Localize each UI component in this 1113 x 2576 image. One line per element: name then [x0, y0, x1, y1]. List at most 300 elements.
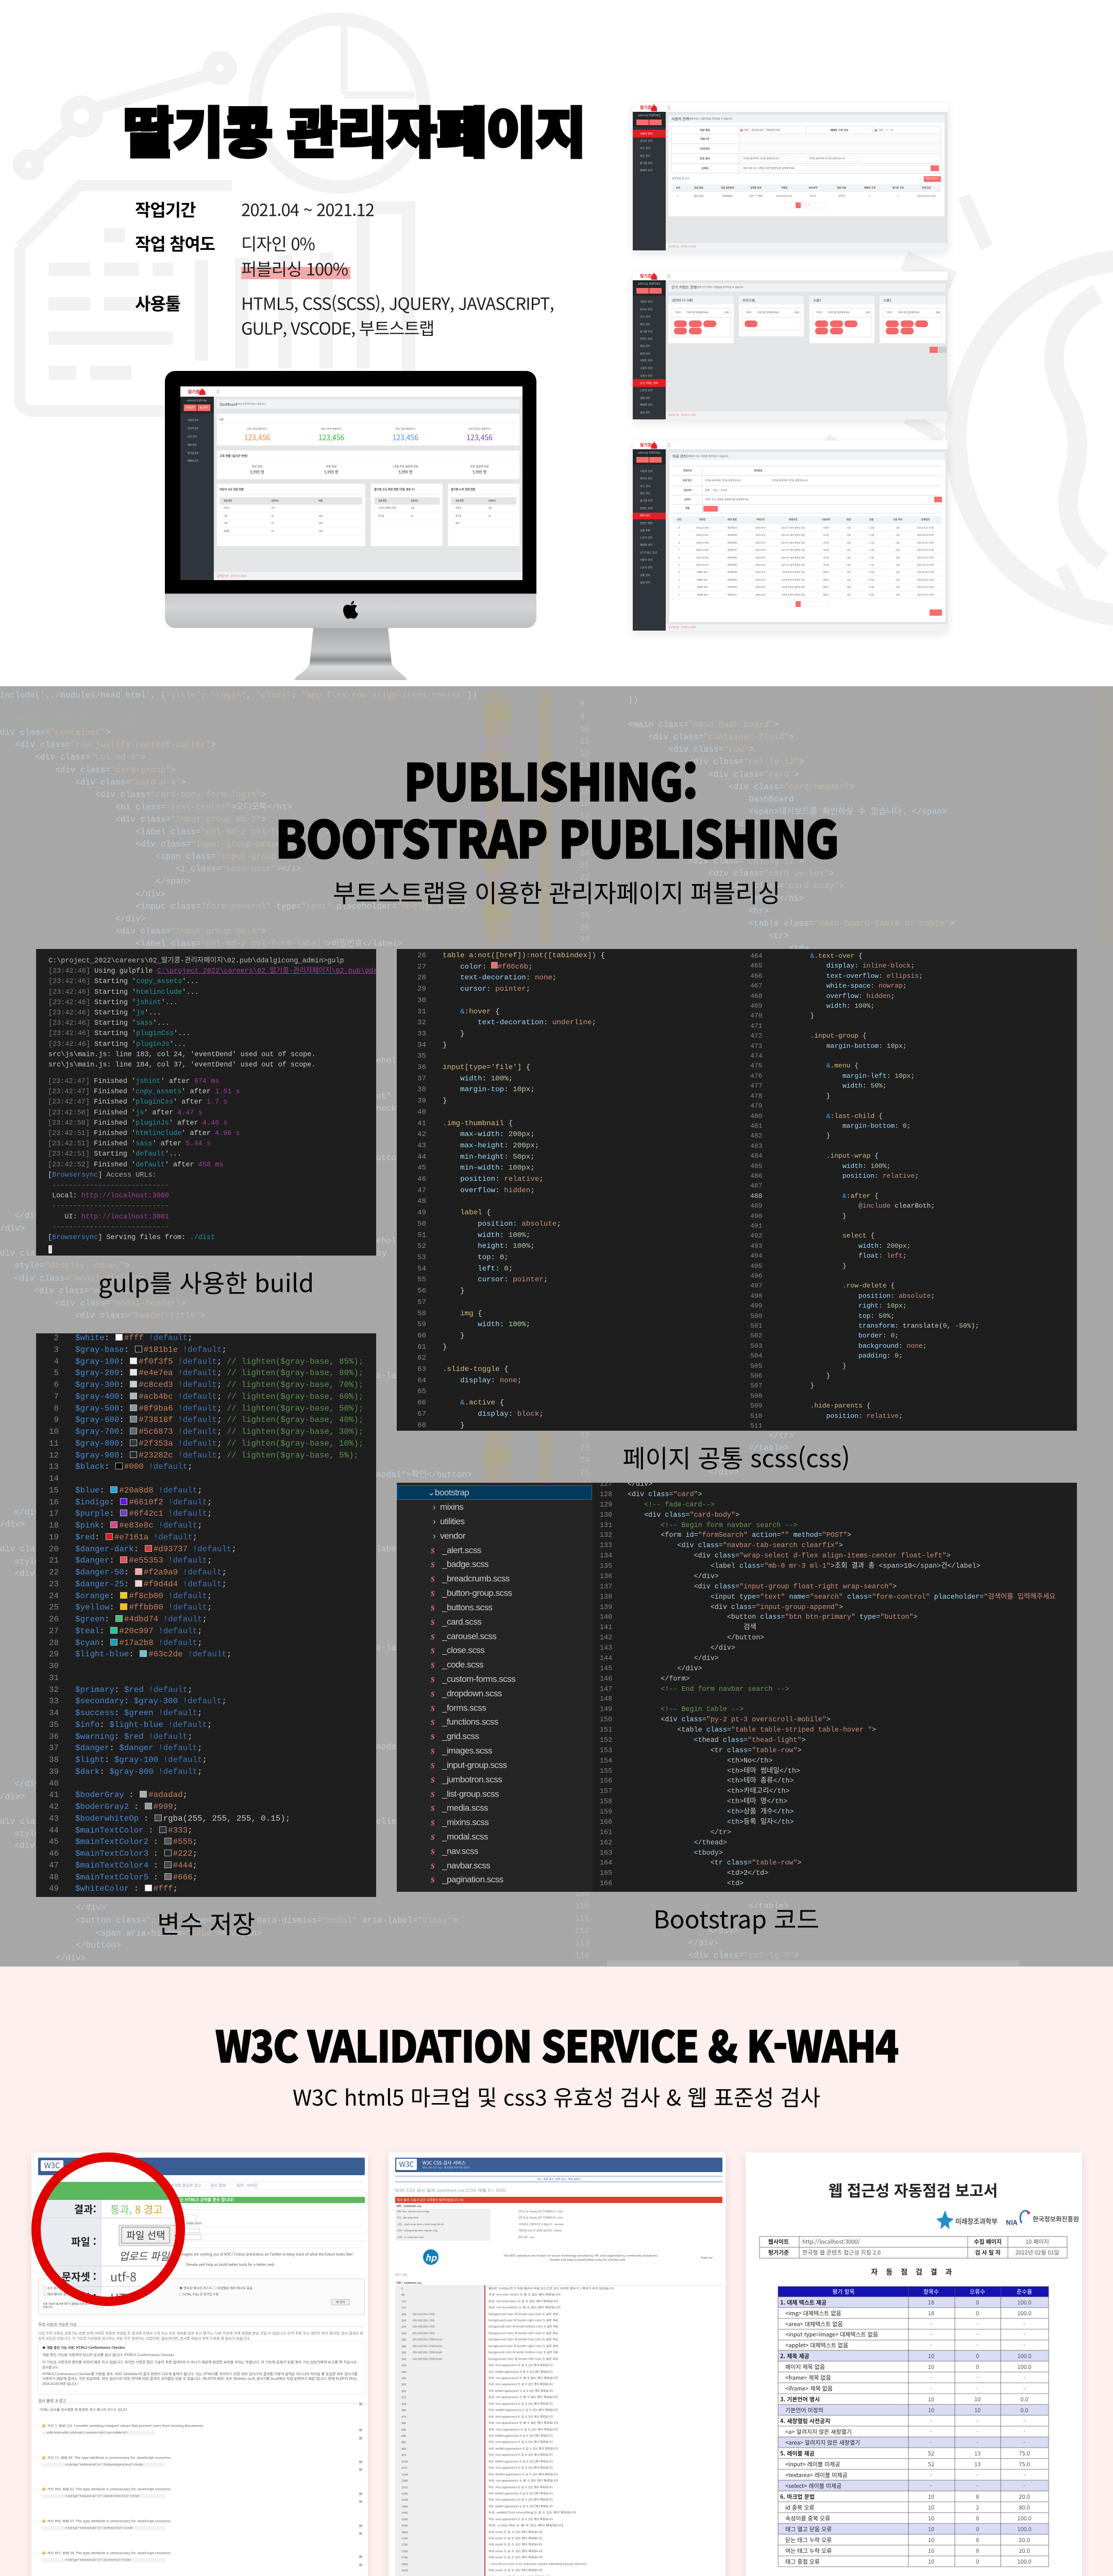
title line 2: BOOTSTRAP PUBLISHING	[275, 799, 838, 873]
admin screen: keyword management: 키워드를 입력해주세요	[898, 311, 920, 314]
admin screen: theme management: 8	[679, 541, 680, 545]
admin screen: theme management: 아이폰	[823, 526, 829, 530]
card: CSS3 validity check: background-color 와 border-left-color 는 같은 색상	[488, 2357, 558, 2361]
card: CSS3 validity check: 속성 -o-box-flex 는 알 수 있는 벤더 확장입니다	[488, 2523, 563, 2528]
admin screen: theme management: 00000008	[728, 541, 737, 545]
info: tools	[135, 291, 554, 340]
file tree: s	[431, 1788, 435, 1800]
admin screen: keyword management: 인기 키워드 관리	[671, 285, 697, 290]
admin screen: theme management: 6	[679, 556, 680, 560]
card: HTML markup check: 주의와 중요한 경고	[171, 2182, 201, 2189]
card: web accessibility report: 미래창조과학부	[955, 2216, 998, 2226]
card: CSS3 validity check: 1418	[401, 2498, 408, 2502]
dashboard screen: 30	[411, 515, 413, 518]
panel: bootstrap code: </div> <div class="card"> <!-- fade-card--> <div class="card-body"> <!-- Begin form navbar search --> <form id="formSearch" action="" method="POST"> <div class="navbar-tab-search clearfix"> <div class="wrap-select d-flex align-items-center float-left"> <label class="mb-0 mr-3 ml-1">조회 결과 총 <span>10</span>건</label> </div> <div class="input-group float-right wrap-search"> <input type="text" name="search" class="form-control" placeholder="검색어를 입력해주세요 <div class="input-group-append"> <button class="btn btn-primary" type="button"> 검색 </button> </div> </div> </div> </form> <!-- End form navbar search --> <!-- Begin table --> <div class="py-2 pt-3 overscroll-mobile"> <table class="table table-striped table-hover "> <thead class="thead-light"> <tr class="table-row"> <th>No</th> <th>테마 썸네일</th> <th>테마 종류</th> <th>카테고리</th> <th>테마 명</th> <th>상품 개수</th> <th>등록 일자</th> </tr> </thead> <tbody> <tr class="table-row"> <td>2</td> <td>	[628, 1483, 1055, 1888]
card: CSS3 validity check: 968	[401, 2447, 406, 2451]
card: HTML markup check: 다음 주의 사항은 검증기는 검증 전에 어떠한 추측성 작업을 한 결과에 의해서 누락 또는 송동 정보를 감조 표시 했거나, 다른 이유에 의해 영향을 받은 것일 수 있습니다. 만약 추측 또는 대안이 맞지 않다면, 검사 결과는 완	[38, 2330, 363, 2335]
card: CSS3 validity check: 186	[401, 2337, 406, 2342]
card: CSS3 validity check: background-color 와 border-top-color 는 같은 색상	[488, 2337, 558, 2341]
card: HTML markup check: 라인 457, 칼럼 54: The type attribute is unnecessary for JavaScript resources.	[47, 2550, 172, 2555]
card: web accessibility report: 75.0	[1019, 2460, 1030, 2468]
card: HTML markup check: 주의 사항과 가능한 이슈	[38, 2321, 77, 2328]
card: CSS3 validity check: 923	[401, 2453, 406, 2457]
dashboard screen: 일반 회원	[252, 464, 262, 469]
info: participation: 퍼블리싱 100%	[241, 256, 348, 280]
card: CSS3 validity check: W3C	[399, 2159, 414, 2170]
dashboard screen: DAU (전일 방문자수)	[247, 427, 267, 431]
background code editor: a-la	[376, 1643, 396, 1653]
card: CSS3 validity check: 속성 -moz-appearance 는 값 수 있는 벤더 확장입니다	[488, 2414, 553, 2418]
admin screen: user management: 메토 관리	[640, 155, 650, 158]
card: HTML markup check: Donate and help us build better tools for a better web.	[186, 2262, 275, 2267]
card: CSS3 validity check: 600	[401, 2434, 406, 2438]
card: HTML markup check: □ 소스 보기	[43, 2285, 59, 2291]
card: web accessibility report: -	[1023, 2330, 1025, 2338]
dashboard screen: 100	[488, 507, 492, 510]
card: HTML markup check: 이 기능은 사용자의 편의를 위하여 제공 하고 있습니다. 하지만 사용한 첨단 기술의 최종 업데이트가 아니기 때문에 완전한 보장을 하지는 못합니다. 이 기능에 문제가 있을 경우 기능 담당자에게 보고를 해 주십시오.	[42, 2359, 358, 2364]
admin screen: user management: Y	[897, 195, 899, 198]
card: web accessibility report: -	[976, 2438, 979, 2447]
red highlight ring: 결과:	[74, 2201, 96, 2216]
admin screen: theme management: 2021.08.10 14:00	[917, 571, 934, 574]
label: bootstrap code: Bootstrap 코드	[653, 1900, 819, 1936]
card: CSS3 validity check: 1756	[401, 2543, 408, 2547]
card: web accessibility report: 2	[976, 2503, 979, 2512]
background code editor: </div> <div class="col-lg-3">	[688, 1938, 799, 1960]
file tree: s	[431, 1659, 435, 1670]
card: CSS3 validity check: 속성 -webkit-appearance 는 값 수 있는 벤더 확장입니다	[488, 2492, 553, 2496]
card: CSS3 validity check: 속성 -webkit-appearance 는 값 수 있는 벤더 확장입니다	[488, 2388, 553, 2393]
admin screen: user management: 1	[678, 195, 679, 198]
admin screen: theme management: 상품	[869, 518, 873, 521]
admin screen: user management: 베베북 구독 여부	[830, 129, 849, 132]
card: CSS3 validity check: 1596	[401, 2517, 408, 2521]
card: CSS3 validity check: 경고 (34)	[395, 2272, 407, 2277]
card: web accessibility report: <input type=image> 대체텍스트 없음	[785, 2330, 878, 2338]
panel: page common scss: table a:not([href]):not([tabindex]) { color: #f86c6b; text-decoration: none; cursor: pointer; &:hover { text-decoration: underline; } } input[type='file'] { width: 100%; margin-top: 10px; } .img-thumbnail { max-width: 200px; max-height: 200px; min-height: 50px; min-width: 100px; position: relative; overflow: hidden; label { position: absolute; width: 100%; height: 100%; top: 0; left: 0; cursor: pointer; } img { width: 100%; } } .slide-toggle { display: none; &.active { display: block; }	[443, 952, 605, 1430]
admin screen: user management: 베베북 관리	[640, 169, 652, 172]
file tree: _button-group.scss	[442, 1588, 512, 1598]
admin screen: keyword management: 키워드를 입력해주세요	[757, 311, 779, 314]
card: CSS3 validity check: ::-moz-focus-inner is an unknown vendor extended pseudo-element	[488, 2563, 586, 2566]
dashboard screen: admin님 안녕하세요	[187, 399, 207, 402]
icon: apple logo	[343, 601, 358, 619]
card: CSS3 validity check: 속성 -moz-appearance 는 값 수 있는 벤더 확장입니다	[488, 2498, 553, 2502]
admin screen: user management: 등록되어있는 사용자들을 관리하실 수 있습니다.	[687, 117, 733, 121]
admin screen: theme management: 00000009	[728, 534, 737, 537]
file tree: s	[431, 1731, 435, 1742]
admin screen: user management: 회원 일련번호	[721, 186, 734, 190]
card: CSS3 validity check: 해석 오류 : auto	[518, 2235, 534, 2239]
card: CSS3 validity check: 496 face .docum-cont .image	[397, 2210, 430, 2213]
admin screen: theme management: 00000002	[728, 586, 737, 589]
card: web accessibility report: 여는 태그 누락 오류	[785, 2547, 832, 2555]
file tree: s	[431, 1716, 435, 1727]
background code editor: ut"	[376, 1091, 391, 1101]
card: CSS3 validity check: background-color 와 border-bottom-color 는 같은 색상	[488, 2350, 558, 2354]
file tree: _list-group.scss	[442, 1789, 499, 1799]
card: CSS3 validity check: 속성 -ms-appearance 는 알 수 없는 벤더 확장입니다	[488, 2376, 558, 2380]
card: CSS3 validity check: .btn:not(.btn-).title.hover	[412, 2350, 443, 2354]
card: CSS3 validity check: 234	[401, 2363, 406, 2367]
dashboard screen: 사용자수	[411, 499, 418, 502]
dashboard screen: 5,999 명	[250, 469, 264, 475]
dashboard screen: 123,456	[318, 432, 344, 443]
card: HTML markup check: width=device-width, initial-scale=1, maximum-scale=1, user-scalable=no">	[47, 2431, 128, 2434]
admin screen: keyword management	[633, 272, 948, 419]
dashboard screen: 회원 종류	[456, 499, 464, 502]
admin screen: theme management: 테마스토어	[755, 541, 766, 545]
card: web accessibility report: 20.0	[1019, 2547, 1030, 2555]
admin screen: theme management: 윤찬딸기콩 - 관리자 © 2020	[668, 625, 696, 629]
file tree: s	[431, 1602, 435, 1613]
red highlight ring: 파일 선택	[126, 2228, 165, 2242]
card: CSS3 validity check: 186	[401, 2350, 406, 2354]
admin screen: keyword management: 사용자 관리	[640, 374, 652, 378]
card: web accessibility report: 5. 레이블 제공	[780, 2449, 815, 2458]
admin screen: theme management: 사용	[847, 548, 851, 552]
panel: page common scss: 464 465 466 467 468 469 470 471 472 473 474 475 476 477 478 479 480 481 482 483 484 485 486 487 488 489 490 491 492 493 494 495 496 497 498 499 500 501 502 503 504 505 506 507 508 509 510 511	[750, 952, 762, 1430]
card: web accessibility report: 태그 중첩 오류	[785, 2557, 820, 2566]
admin screen: keyword management: 공통 관리	[640, 397, 650, 400]
dashboard screen: 딸기콩 신규 회원 현황 (전일 생성 수)	[374, 487, 415, 492]
file tree: _nav.scss	[442, 1846, 478, 1856]
admin screen: keyword management: 관리자 관리	[640, 308, 652, 311]
admin screen: theme management: 사용	[847, 556, 851, 560]
admin screen: theme management: 테마종류	[754, 469, 763, 472]
red highlight ring	[31, 2153, 185, 2306]
admin screen: user management: 사용자 관리	[671, 116, 689, 122]
info: tools: GULP, VSCODE, 부트스트랩	[241, 315, 434, 340]
background code editor: <div class="modal-dialog">	[14, 1274, 145, 1283]
dashboard screen: 탈퇴	[456, 521, 460, 525]
card: web accessibility report: 6. 마크업 문법	[780, 2493, 815, 2501]
admin screen: theme management: 사용	[896, 585, 900, 589]
card: web accessibility report: id 중복 오류	[785, 2503, 814, 2512]
card: CSS3 validity check: .btn:not(.btn-).title.hover	[412, 2358, 443, 2361]
card: HTML markup check: 축하 · 아이콘	[237, 2182, 258, 2189]
admin screen: theme management: 테마스토어	[755, 533, 766, 537]
card: CSS3 validity check: 186	[401, 2357, 406, 2361]
card: HTML markup check: □ HTML-Tidy 로 마크업 수정	[179, 2292, 218, 2297]
admin screen: theme management: 스토리 관리	[640, 536, 652, 540]
file tree: s	[431, 1817, 435, 1828]
card: web accessibility report: <iframe> 제목 없음	[785, 2384, 833, 2393]
admin screen: keyword management: 키워드	[886, 311, 892, 314]
card: CSS3 validity check: 1334	[401, 2472, 408, 2477]
card: web accessibility report: 10	[928, 2352, 934, 2360]
card: CSS3 validity check: 324	[401, 2402, 406, 2406]
info: work period: 작업기간	[135, 197, 195, 222]
admin screen: keyword management: 키워드	[746, 311, 752, 314]
admin screen: theme management: 그림책 콘텐츠 컬렉션 모음	[781, 578, 805, 582]
admin screen: theme management: 이것을 클릭하여 기간을 설정하십시오	[772, 479, 808, 482]
card: CSS3 validity check: 2193	[401, 2568, 408, 2572]
card: HTML markup check: ◉ 연속된 메시지 리스트 ○ 타입별로 에러 메시지 묶음	[179, 2285, 252, 2291]
file tree: s	[431, 1587, 435, 1599]
card: CSS3 validity check: 184	[401, 2325, 406, 2329]
admin screen: theme management: 그림책 콘텐츠 컬렉션 모음	[781, 593, 805, 597]
background code editor: <div	[14, 1569, 35, 1579]
card: CSS3 validity check: 속성 -ms-appearance 는 알 수 없는 벤더 확장입니다	[488, 2478, 558, 2482]
background code editor: <div class="header-title">	[75, 1311, 206, 1320]
background code editor: ehol	[376, 1056, 396, 1065]
card: CSS3 validity check: .btn:not(.btn-).title	[412, 2325, 435, 2329]
admin screen: theme management: 갤럭시	[823, 578, 829, 582]
admin screen: theme management: 2021.08.10 14:00	[917, 556, 934, 560]
card: web accessibility report: 52	[928, 2449, 934, 2458]
admin screen: theme management: 10	[678, 527, 681, 530]
admin screen: keyword management: 연령별 인기 키워드 현황들을 관리하실 수 있습니다.	[695, 285, 744, 289]
background code editor: <button class="close" type="button" data-dismiss="modal" aria-label="Close">	[76, 1916, 458, 1925]
panel: scss variables: $white: #fff !default; $gray-base: #181b1e !default; $gray-100: #f0f3f5 !default; // lighten($gray-base, 85%); $gray-200: #e4e7ea !default; // lighten($gray-base, 80%); $gray-300: #c8ced3 !default; // lighten($gray-base, 70%); $gray-400: #acb4bc !default; // lighten($gray-base, 60%); $gray-500: #8f9ba6 !default; // lighten($gray-base, 50%); $gray-600: #73818f !default; // lighten($gray-base, 40%); $gray-700: #5c6873 !default; // lighten($gray-base, 30%); $gray-800: #2f353a !default; // lighten($gray-base, 10%); $gray-900: #23282c !default; // lighten($gray-base, 5%); $black: #000 !default; $blue: #20a8d8 !default; $indigo: #6610f2 !default; $purple: #6f42c1 !default; $pink: #e83e8c !default; $red: #e7161a !default; $danger-dark: #d93737 !default; $danger: #e55353 !default; $danger-50: #f2a9a9 !default; $danger-25: #f9d4d4 !default; $orange: #f8cb00 !default; $yellow: #ffbb00 !default; $green: #4dbd74 !default; $teal: #20c997 !default; $cyan: #17a2b8 !default; $light-blue: #63c2de !default; $primary: $red !default; $secondary: $gray-300 !default; $success: $green !default; $info: $light-blue !default; $warning: $red !default; $danger: $danger !default; $light: $gray-100 !default; $dark: $gray-800 !default; $boderGray : #adadad; $boderGray2 : #999; $boderwhiteOp : rgba(255, 255, 255, 0.15); $mainTextColor : #333; $mainTextColor2 : #555; $mainTextColor3 : #222; $mainTextColor4 : #444; $mainTextColor5 : #666; $whiteColor : #fff;	[75, 1333, 363, 1893]
card: web accessibility report: 검 사 일 자	[975, 2248, 1001, 2257]
background code editor: </button>	[76, 1940, 121, 1950]
file tree: s	[431, 1874, 435, 1885]
card: web accessibility report: 8	[976, 2547, 979, 2555]
file tree: _alert.scss	[442, 1546, 481, 1555]
admin screen: theme management: 관리자 관리	[640, 477, 652, 480]
card: CSS3 validity check: 속성 zoom 는 값 수 있는 벤더 확장입니다	[488, 2568, 543, 2572]
card: web accessibility report: <select> 레이블 미제공	[785, 2482, 841, 2490]
card: web accessibility report: <frame> 제목 없음	[785, 2374, 831, 2382]
card: CSS3 validity check: .btn:not(.btn-).title.hover	[412, 2344, 443, 2348]
dashboard screen: MAU (전달 방문자수)	[395, 427, 416, 431]
card: web accessibility report: 20.0	[1019, 2536, 1030, 2544]
card: CSS3 validity check: W3C CSS 검사 결과 common.css (CSS 레벨 3 + SVG)	[395, 2188, 506, 2193]
admin screen: theme management: 00000005	[728, 564, 737, 567]
dashboard screen: 123,456	[244, 432, 270, 443]
background code editor: </tr> </table>	[749, 1431, 794, 1453]
card: CSS3 validity check: .btn:not(.btn-).title.hover	[412, 2338, 443, 2341]
file tree: s	[431, 1688, 435, 1699]
card: web accessibility report: -	[930, 2438, 932, 2447]
admin screen: theme management: 사용	[896, 593, 900, 597]
card: CSS3 validity check: background-color 와 border-right-color 는 같은 색상	[488, 2318, 558, 2323]
dashboard screen: 딸기콩	[456, 514, 461, 518]
card: HTML markup check	[31, 2153, 368, 2576]
admin screen: theme management: 사용	[847, 593, 851, 597]
card: web accessibility report: 0	[976, 2309, 979, 2317]
card: CSS3 validity check: .btn:not(.btn-).title	[412, 2312, 435, 2316]
dashboard screen: 30	[488, 515, 491, 518]
card: web accessibility report: 0	[976, 2298, 979, 2307]
card: CSS3 validity check: 속성 -moz-appearance 는 값 수 있는 벤더 확장입니다	[488, 2428, 558, 2432]
dashboard screen: 1개월 무료 월정액 회원	[393, 464, 418, 469]
card: CSS3 validity check: 0	[401, 2286, 403, 2291]
card: CSS3 validity check: 불러온 스타일시트가 직접 열려서 파일 있으므로 모드 처리된 결과가 3 확대가 되지 않았습니다.	[488, 2286, 615, 2291]
panel: gulp terminal: [23:42:47] Finished 'jshint' after 974 ms [23:42:47] Finished 'copy_assets' after 1.51 s [23:42:47] Finished 'pluginCss' after 1.7 s [23:42:50] Finished 'js' after 4.47 s [23:42:50] Finished 'pluginJs' after 4.46 s [23:42:51] Finished 'htmlinclude' after 4.96 s [23:42:51] Finished 'sass' after 5.44 s [23:42:51] Starting 'default'... [23:42:52] Finished 'default' after 458 ms [Browsersync] Access URLs: ---------------------------- Local: http://localhost:3000 ---------------------------- UI: http://localhost:3001 ---------------------------- [Browsersync] Serving files from: ./dist	[48, 1078, 240, 1242]
card: CSS3 validity check: background-color 와 border-right-color 는 같은 색상	[488, 2344, 558, 2348]
admin screen: user management: 이메일	[781, 186, 787, 190]
background code editor: <div class="modal fade" id="modal" tabindex="-1" role="dialog" aria-labelledby	[0, 1248, 387, 1258]
admin screen: theme management: 사용	[896, 570, 900, 574]
admin screen: theme management: 테마스토어	[755, 563, 766, 567]
admin screen: user management: 곽주영	[838, 194, 845, 198]
card: CSS3 validity check: 1372	[401, 2485, 408, 2489]
admin screen: keyword management: 등록	[724, 311, 729, 314]
file tree: s	[431, 1702, 435, 1714]
admin screen: theme management: 베베북 관리	[640, 543, 652, 547]
admin screen: theme management: 사용 여부	[893, 518, 902, 521]
card: HTML markup check: <script type="text/javascript" src="./js/theme.min.js"></script>	[65, 2526, 133, 2530]
card: web accessibility report: 100.0	[1017, 2352, 1032, 2360]
admin screen: theme management: 아이폰	[823, 533, 829, 537]
admin screen: theme management: 등록되어 있는 테마를 관리하실 수 있습니다.	[687, 454, 729, 458]
subtitle: 부트스트랩을 이용한 관리자페이지 퍼블리싱	[333, 873, 780, 909]
file tree: mixins	[440, 1502, 463, 1512]
red highlight ring: HTML5	[110, 2289, 148, 2306]
card: CSS3 validity check: 320	[401, 2389, 406, 2393]
admin screen: theme management: 테마스토어	[755, 585, 766, 589]
admin screen: keyword management: 콘텐츠 관리	[640, 337, 652, 341]
admin screen: theme management	[633, 440, 948, 631]
card: web accessibility report: 오류수	[970, 2287, 985, 2296]
card: web accessibility report: <applet> 대체텍스트 없음	[785, 2341, 848, 2349]
card: CSS3 validity check: 속성 zoom 는 값 수 있는 벤더 확장입니다	[488, 2542, 543, 2546]
card: HTML markup check: 라인 11, 칼럼 66: The type attribute is unnecessary for JavaScript resources.	[47, 2455, 172, 2460]
admin screen: theme management: 그림책 콘텐츠 컬렉션 모음	[781, 570, 805, 574]
card: web accessibility report: -	[1023, 2482, 1025, 2490]
background code editor: <div class="modal-content">	[34, 1286, 170, 1296]
background code editor: 8 9 10 11 12 13 14 15 16 17 18 19 20 21 22 23 24 25 26 27 28	[580, 699, 590, 957]
admin screen: theme management: 7	[679, 549, 680, 552]
card: HTML markup check: index.html	[186, 2221, 202, 2226]
heading: publishing	[275, 741, 838, 909]
dashboard screen: WAU (전주 방문자수)	[321, 427, 342, 431]
dashboard screen: 123,456	[392, 432, 418, 443]
admin screen: keyword management: 스쿨1	[813, 297, 821, 302]
card: web accessibility report: 웹사이트	[768, 2238, 789, 2246]
card: web accessibility report: 10	[974, 2395, 981, 2403]
file tree: _close.scss	[442, 1646, 484, 1655]
info: participation: 디자인 0%	[241, 231, 315, 256]
dashboard screen: 비율	[319, 499, 323, 502]
card: web accessibility report: -	[930, 2374, 932, 2382]
admin screen: theme management: 3	[679, 579, 680, 582]
card: CSS3 validity check: 1395	[401, 2492, 408, 2496]
admin screen: theme management: 등록일자	[921, 518, 930, 521]
admin screen: keyword management: 메토 관리	[640, 323, 650, 327]
card: web accessibility report: -	[1023, 2428, 1025, 2436]
admin screen: theme management: 5	[679, 564, 680, 567]
card: CSS3 validity check: .btn:not(.btn-).title	[412, 2318, 435, 2323]
card: web accessibility report: 10	[928, 2547, 934, 2555]
card: CSS3 validity check: 속성 -webkit-appearance 는 값 수 있는 벤더 확장입니다	[488, 2446, 558, 2450]
admin screen: theme management: 테마스토어	[755, 556, 766, 560]
card: web accessibility report: 10	[928, 2514, 934, 2522]
card: web accessibility report: -	[930, 2417, 932, 2425]
card: HTML markup check: <script type="text/javascript" src="./js/common.js"></script>	[65, 2558, 131, 2562]
card: web accessibility report: -	[976, 2417, 979, 2425]
card: web accessibility report: 100.0	[1017, 2514, 1032, 2522]
card: HTML markup check: W3C	[44, 2160, 60, 2171]
dashboard screen: 딸기콩 누적 회원 현황	[451, 487, 475, 492]
file tree: _code.scss	[442, 1660, 483, 1669]
card: web accessibility report: -	[930, 2320, 932, 2328]
card: HTML markup check: 2016.02.05 버전 입니다.)	[42, 2381, 78, 2386]
admin screen: theme management: 사용	[896, 526, 900, 530]
admin screen: theme management: 4~6세	[869, 585, 874, 589]
admin screen: keyword management: 사용자 관리	[640, 367, 652, 370]
card: CSS3 validity check: 속성 -webkit-appearance 는 값 수 있는 벤더 확장입니다	[488, 2504, 553, 2508]
dashboard screen: 5,999 명	[473, 469, 486, 475]
dashboard screen: 플랫폼	[224, 529, 229, 533]
admin screen: theme management: 1~3세	[869, 526, 874, 530]
file tree: _images.scss	[442, 1745, 492, 1756]
background code editor: utto	[376, 1153, 396, 1163]
file tree: s	[431, 1759, 435, 1771]
file tree: s	[431, 1802, 435, 1814]
file tree: ⌄	[428, 1488, 435, 1497]
admin screen: keyword management: 설정 관리	[640, 411, 650, 414]
card: CSS3 validity check: 1496	[401, 2511, 408, 2515]
card: CSS3 validity check: 1896	[401, 2562, 408, 2566]
card: web accessibility report: 0	[976, 2363, 979, 2371]
info: tools: HTML5, CSS(SCSS), JQUERY, JAVASCRIPT,	[241, 291, 554, 315]
card: CSS3 validity check: 속성 -webkit-appearance 는 값 수 있는 벤더 확장입니다	[488, 2408, 558, 2412]
card: web accessibility report: 한국정보화진흥원	[1033, 2214, 1079, 2224]
admin screen: user management: 엑셀 다운로드	[925, 177, 939, 180]
file tree: _badge.scss	[442, 1559, 488, 1569]
admin screen: user management	[633, 103, 948, 250]
card: HTML markup check: 있습니다.	[43, 2305, 53, 2309]
admin screen: theme management: 00000003	[728, 579, 737, 582]
admin screen: theme management: 일러스트 테마 컬렉션 모음	[781, 563, 805, 567]
card: CSS3 validity check: 96	[401, 2293, 404, 2297]
admin screen: theme management: 2021.08.10 14:00	[917, 579, 934, 582]
admin screen: user management: 이것을 클릭하여 기간을 설정하십시오.	[743, 157, 780, 160]
admin screen: theme management: 일러스트 테마 컬렉션 모음	[781, 533, 805, 537]
card: CSS3 validity check: 속성 zoom 는 값 수 있는 벤더 확장입니다	[488, 2549, 543, 2553]
card: CSS3 validity check: 922 .tab-wrap-item	[397, 2216, 418, 2219]
admin screen: keyword management: 결제 관리	[640, 352, 650, 355]
dashboard screen: 회원 종류	[378, 499, 387, 502]
dashboard screen: 관리자 관리	[188, 427, 199, 430]
info: participation: 작업 참여도	[135, 231, 215, 256]
card: CSS3 validity check: 속성 -ms-user-select 는 알 수 없는 벤더 확장입니다	[488, 2293, 561, 2297]
admin screen: theme management: 설정 관리	[640, 581, 650, 584]
file tree: ›	[433, 1517, 435, 1526]
card: CSS3 validity check: 2182 .sc-wrap-box-color	[397, 2235, 424, 2239]
admin screen: theme management: 사용	[896, 548, 900, 552]
file tree: s	[431, 1845, 435, 1857]
card: CSS3 validity check: 기능 · 파일 검사 · 입력 검사 · 파일 업로드	[536, 2177, 581, 2181]
card: web accessibility report: 52	[928, 2460, 934, 2468]
card: HTML markup check: ◆ 개발 중인 기능 사용: HTML5 Conformance Checker.	[42, 2345, 126, 2350]
admin screen: user management: 00000002	[722, 195, 733, 198]
dashboard screen: 정보수정	[186, 405, 194, 410]
card: web accessibility report: -	[1023, 2471, 1025, 2479]
admin screen: theme management: 2021.08.10 14:00	[917, 586, 934, 589]
file tree: _carousel.scss	[442, 1631, 496, 1641]
dashboard screen: 메토 관리	[188, 443, 197, 447]
card: HTML markup check: 전히 모순된 것입니다. 이 가능한 이슈들을 검사하는 것은 아주 권장하는 작업이며, 필요하다면, 문서를 재검사 하여 수정을 할 필요가 있습니다.	[38, 2335, 250, 2341]
admin screen: theme management: 검색어	[684, 498, 690, 501]
dashboard screen: 라운지	[224, 506, 229, 510]
card: web accessibility report: 100.0	[1017, 2309, 1032, 2317]
dashboard screen: DashBoard	[220, 401, 237, 406]
admin screen: theme management: 테마스토어	[755, 526, 766, 530]
card: CSS3 validity check: 속성 -ms-appearance 는 알 수 없는 벤더 확장입니다	[488, 2395, 558, 2399]
admin screen: theme management: 투명나라 테마	[696, 533, 709, 537]
admin screen: keyword management: 등록	[795, 311, 799, 314]
card: web accessibility report: -	[976, 2428, 979, 2436]
dashboard screen: 라운지 신규 회원 현황	[220, 487, 244, 492]
card: CSS3 validity check: 184	[401, 2331, 406, 2335]
card: web accessibility report: 18	[928, 2309, 934, 2317]
panel: gulp terminal	[36, 949, 376, 1256]
